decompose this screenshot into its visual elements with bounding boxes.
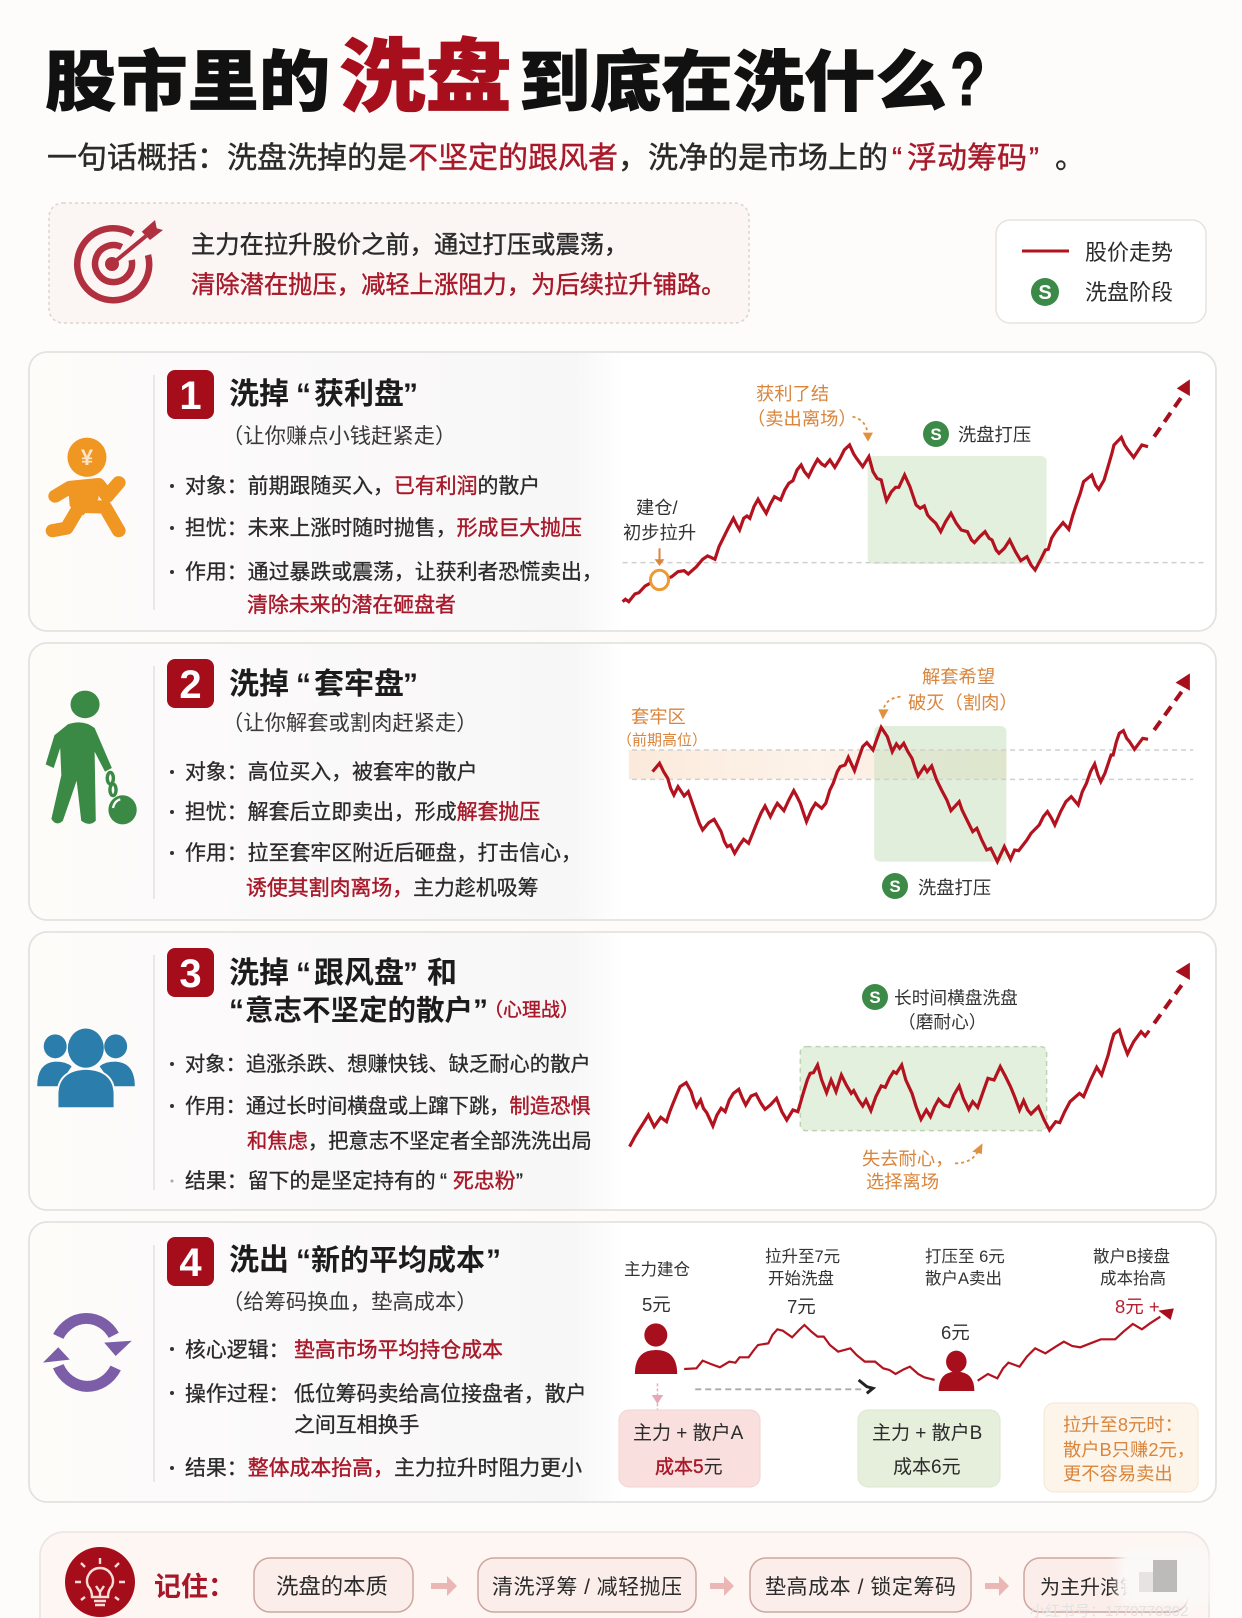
number badge 3: 3 (179, 952, 202, 996)
panel: 2 trapped holders (29, 643, 1216, 920)
heading 1: 洗掉 (229, 378, 289, 411)
chart 4: cost base diagram: 8元 + (1115, 1296, 1160, 1317)
icon: light bulb (65, 1547, 135, 1617)
legend: wash icon: S (1038, 282, 1052, 304)
heading 4: “ (296, 1244, 311, 1277)
chart 2: pull-up into trapped zone: S (889, 877, 901, 896)
heading 4: 新的平均成本 (311, 1244, 485, 1277)
panel: remember summary strip (40, 1532, 1210, 1618)
remember label: 记住： (154, 1572, 235, 1602)
legend (996, 220, 1206, 323)
bullets 2: 对象：高位买入，被套牢的散户 (185, 761, 477, 784)
heading 3: 跟风盘 (314, 957, 404, 990)
number badge 2: 2 (179, 663, 202, 707)
heading 4: ” (486, 1244, 501, 1277)
icon: purple cycle arrows (43, 1318, 132, 1386)
cost box: orange note: 更不容易卖出 (1063, 1463, 1173, 1484)
heading 3: “ (296, 957, 311, 990)
cost box: pink: 主力 + 散户A (633, 1422, 744, 1444)
number badge 2 (167, 659, 214, 708)
arrow (710, 1576, 734, 1596)
chart 1: shake-out after profit: 建仓/ (636, 497, 679, 518)
bullets 3: 死忠粉 (453, 1170, 516, 1193)
icon: figure with ball and chain (46, 691, 137, 824)
bullets 1: 担忧：未来上涨时随时抛售，形成巨大抛压 (185, 517, 582, 540)
panel: definition callout (49, 203, 749, 323)
bullets 3: “ (440, 1170, 447, 1193)
chart 4: cost base diagram (619, 1247, 1198, 1492)
chart 2: pull-up into trapped zone: 解套希望 (922, 666, 995, 687)
chart 4: cost base diagram: 主力建仓 (624, 1260, 690, 1279)
chart 4: cost base diagram: 7元 (787, 1296, 816, 1317)
subheading 4: （给筹码换血，垫高成本） (222, 1290, 478, 1314)
bullets 2: 担忧：解套后立即卖出，形成解套抛压 (185, 801, 540, 824)
chart 4: cost base diagram: 打压至 6元 (925, 1247, 1005, 1266)
number badge 4 (167, 1237, 214, 1286)
chart 3: long sideways consolidation: 长时间横盘洗盘 (894, 988, 1018, 1008)
title: ? (950, 37, 985, 122)
icon: target with arrow (77, 220, 163, 300)
bullets 4 (170, 1339, 586, 1480)
heading 3: ” (473, 994, 488, 1027)
bullets 4: 之间互相换手 (294, 1414, 419, 1437)
chart 3: long sideways consolidation: （磨耐心） (898, 1012, 986, 1032)
chart 4: cost base diagram: 成本抬高 (1100, 1269, 1166, 1288)
step 4 (1024, 1558, 1188, 1612)
bullets 1: 作用：通过暴跌或震荡，让获利者恐慌卖出， (185, 561, 603, 584)
subtitle: 不坚定的跟风者 (408, 142, 618, 175)
panel: 3 followers (29, 932, 1216, 1210)
legend: price label: 股价走势 (1085, 240, 1173, 265)
subtitle: 一句话概括：洗盘洗掉的是 (47, 142, 407, 175)
title: 到底在洗什么 (519, 45, 947, 119)
chart 2: pull-up into trapped zone: 破灭（割肉） (908, 692, 1018, 713)
definition text: 清除潜在抛压，减轻上涨阻力，为后续拉升铺路。 (191, 272, 726, 299)
chart 1: shake-out after profit: （卖出离场） (747, 408, 857, 429)
chart 2: pull-up into trapped zone (617, 666, 1193, 899)
subheading 1: （让你赚点小钱赶紧走） (222, 424, 456, 448)
cost box: green: 主力 + 散户B (872, 1422, 982, 1444)
panel: 1 profit-taking holders (29, 352, 1216, 631)
chart 3: long sideways consolidation: 选择离场 (866, 1171, 939, 1192)
title: 股市里的 (45, 45, 330, 119)
heading 3: 意志不坚定的散户 (245, 995, 473, 1027)
arrow (431, 1576, 457, 1596)
number badge 4: 4 (179, 1241, 202, 1285)
subtitle: 浮动筹码 (907, 142, 1027, 175)
number badge 1 (167, 370, 214, 419)
chart 4: cost base diagram: 散户B接盘 (1093, 1247, 1170, 1266)
bullets 2: 作用：拉至套牢区附近后砸盘，打击信心， (185, 842, 582, 865)
bullets 3: 结果：留下的是坚定持有的 (185, 1170, 436, 1193)
icon: yen sign: ¥ (81, 445, 94, 470)
heading 3: 洗掉 (229, 957, 289, 990)
heading 2: “ (296, 668, 311, 701)
title: 洗盘 (339, 33, 512, 122)
heading 2: ” (403, 668, 418, 701)
cost box: orange note: 散户B只赚2元， (1063, 1439, 1195, 1460)
step 2: 清洗浮筹 / 减轻抛压 (492, 1576, 682, 1599)
bullets 4: 垫高市场平均持仓成本 (294, 1339, 503, 1362)
legend: wash icon (1031, 278, 1059, 306)
chart 3: long sideways consolidation: 失去耐心， (862, 1148, 953, 1169)
chart 4: cost base diagram: 散户A卖出 (925, 1269, 1002, 1288)
bullets 4: 结果：整体成本抬高，主力拉升时阻力更小 (185, 1457, 582, 1480)
chart 2: pull-up into trapped zone: 套牢区 (631, 706, 686, 727)
cost box: green (858, 1410, 1000, 1487)
bullets 3: 作用：通过长时间横盘或上蹿下跳，制造恐惧 (185, 1095, 591, 1118)
step 4: 为主升浪铺路 (1040, 1576, 1160, 1599)
bullets 2 (170, 761, 582, 900)
heading 1: “ (296, 378, 311, 411)
heading 4: 洗出 (229, 1244, 289, 1277)
step 3 (750, 1558, 971, 1612)
title (45, 33, 985, 122)
bullets 1: 清除未来的潜在砸盘者 (247, 594, 456, 617)
panel: 4 new average cost (29, 1222, 1216, 1502)
cost box: pink (619, 1410, 760, 1487)
heading 3: “ (229, 994, 244, 1027)
bullets 2: 诱使其割肉离场，主力趁机吸筹 (246, 877, 538, 900)
heading 3: 和 (427, 957, 457, 990)
bullets 1: 对象：前期跟随买入，已有利润的散户 (185, 475, 540, 498)
step 3: 垫高成本 / 锁定筹码 (765, 1576, 956, 1599)
heading 2: 洗掉 (229, 668, 289, 701)
chart 4: cost base diagram: 5元 (642, 1294, 671, 1315)
step 1 (254, 1558, 413, 1612)
bullets 3: 和焦虑，把意志不坚定者全部洗洗出局 (247, 1130, 592, 1153)
cost box: pink: 成本5元 (655, 1456, 723, 1478)
legend: wash label: 洗盘阶段 (1085, 280, 1173, 305)
bullets 4: 核心逻辑： (185, 1339, 289, 1362)
bullets 4: 操作过程： (185, 1383, 289, 1406)
legend: price line (1022, 250, 1069, 252)
heading 3 note: （心理战） (484, 999, 579, 1021)
number badge 3 (167, 948, 214, 997)
bullets 3: 对象：追涨杀跌、想赚快钱、缺乏耐心的散户 (185, 1053, 591, 1076)
chart 1: shake-out after profit: 获利了结 (756, 383, 829, 404)
subtitle: 。 (1055, 142, 1085, 175)
subtitle: ” (1029, 142, 1039, 175)
chart 4: cost base diagram: 6元 (941, 1322, 970, 1343)
chart 4: cost base diagram: 开始洗盘 (768, 1269, 834, 1288)
chart 3: long sideways consolidation (630, 963, 1190, 1192)
cost box: orange note (1044, 1403, 1198, 1492)
heading 3: ” (403, 957, 418, 990)
chart 3: long sideways consolidation: S (869, 988, 881, 1007)
heading 2: 套牢盘 (314, 668, 404, 701)
heading 1: ” (403, 378, 418, 411)
step 1: 洗盘的本质 (276, 1574, 388, 1599)
chart 4: cost base diagram: 拉升至7元 (765, 1247, 840, 1266)
chart 1: shake-out after profit: 洗盘打压 (958, 424, 1031, 445)
chart 1: shake-out after profit: 初步拉升 (623, 522, 696, 543)
chart 1: shake-out after profit: S (930, 425, 942, 444)
bullets 3: ” (516, 1170, 523, 1193)
bullets 4: 低位筹码卖给高位接盘者，散户 (294, 1383, 586, 1406)
chart 2: pull-up into trapped zone: （前期高位） (617, 732, 707, 749)
subheading 2: （让你解套或割肉赶紧走） (222, 711, 478, 735)
cost box: green: 成本6元 (893, 1456, 961, 1478)
arrow (985, 1576, 1009, 1596)
bullets 1 (170, 475, 603, 617)
subtitle: “ (892, 142, 902, 175)
chart 1: shake-out after profit (623, 379, 1205, 602)
subtitle: ，洗净的是市场上的 (618, 142, 888, 175)
number badge 1: 1 (179, 374, 202, 418)
chart 2: pull-up into trapped zone: 洗盘打压 (918, 877, 991, 898)
step 2 (478, 1558, 696, 1612)
watermark blur (1030, 1548, 1210, 1618)
definition text: 主力在拉升股价之前，通过打压或震荡， (191, 232, 628, 259)
heading 1: 获利盘 (314, 378, 404, 411)
icon: running figure with coin (53, 438, 119, 531)
bullets 3 (170, 1053, 592, 1193)
icon: group of people (37, 1029, 135, 1108)
cost box: orange note: 拉升至8元时： (1063, 1414, 1183, 1435)
